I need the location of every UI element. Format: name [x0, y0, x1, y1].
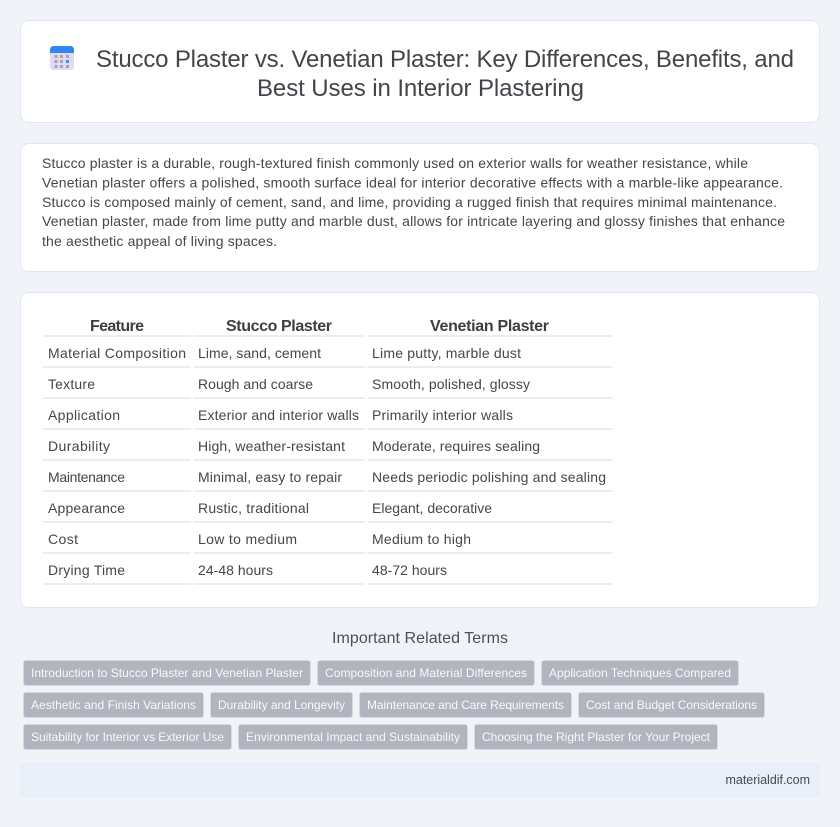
tag: composition: Composition and Material Differences [325, 666, 527, 680]
tag: aesthetic: Aesthetic and Finish Variations [31, 698, 196, 712]
row: application: Exterior and interior walls [198, 407, 359, 423]
tag: application: Application Techniques Compared [549, 666, 731, 680]
table header row [90, 318, 549, 335]
row: maintenance [48, 469, 606, 485]
tag: composition [318, 660, 534, 686]
tag: environmental: Environmental Impact and Sustainability [246, 730, 460, 744]
text block: introduction paragraph: Stucco plaster is a durable, rough-textured finish commonly used on exterior walls for weather resistance, while [42, 155, 748, 171]
tag: choosing: Choosing the Right Plaster for Your Project [482, 730, 711, 744]
row: maintenance: Minimal, easy to repair [198, 469, 342, 485]
icon: calendar [50, 46, 74, 70]
table header row: Feature [90, 318, 144, 335]
row: appearance [48, 500, 492, 516]
row: drying time [48, 562, 447, 578]
related terms tags [24, 660, 764, 750]
row: texture: Texture [48, 376, 95, 392]
tag: suitability: Suitability for Interior vs Exterior Use [31, 730, 224, 744]
row: material composition: Lime putty, marble dust [372, 345, 521, 361]
text block: introduction paragraph: Venetian plaster offers a polished, smooth surface ideal for interior decorative effects with a marble-like appearance. [42, 174, 783, 190]
row: durability: Durability [48, 438, 110, 454]
tag: cost: Cost and Budget Considerations [586, 698, 757, 712]
table header row: Venetian Plaster [430, 318, 549, 335]
tag: choosing [474, 724, 718, 750]
row: cost: Cost [48, 531, 78, 547]
row: drying time: Drying Time [48, 562, 125, 578]
row: durability: High, weather-resistant [198, 438, 345, 454]
tag: introduction: Introduction to Stucco Plaster and Venetian Plaster [31, 666, 303, 680]
table row lines [43, 336, 612, 584]
tag: introduction [24, 660, 310, 686]
row: texture [48, 376, 530, 392]
text block: introduction paragraph: the aesthetic appeal of living spaces. [42, 233, 277, 249]
row: application: Primarily interior walls [372, 407, 513, 423]
row: application: Application [48, 407, 120, 423]
row: material composition [48, 345, 521, 361]
row: texture: Rough and coarse [198, 376, 313, 392]
tag: maintenance [360, 692, 572, 718]
row: drying time: 48-72 hours [372, 562, 447, 578]
tag: environmental [238, 724, 468, 750]
text block: introduction paragraph: Stucco is composed mainly of cement, sand, and lime, providing a rugged finish that requires minimal maintenance. [42, 194, 777, 210]
row: material composition: Material Composition [48, 345, 186, 361]
tag: maintenance: Maintenance and Care Requirements [367, 698, 564, 712]
row: appearance: Rustic, traditional [198, 500, 309, 516]
panel: introduction [20, 144, 820, 272]
row: drying time: 24-48 hours [198, 562, 273, 578]
footer [20, 763, 820, 797]
row: cost: Low to medium [198, 531, 297, 547]
row: material composition: Lime, sand, cement [198, 345, 321, 361]
row: maintenance: Needs periodic polishing and sealing [372, 469, 606, 485]
row: appearance: Appearance [48, 500, 125, 516]
row: application [48, 407, 513, 423]
panel: comparison table [20, 292, 820, 608]
row: texture: Smooth, polished, glossy [372, 376, 530, 392]
tag: durability: Durability and Longevity [218, 698, 345, 712]
title [96, 46, 794, 102]
row: maintenance: Maintenance [48, 469, 125, 485]
title: Best Uses in Interior Plastering [257, 75, 584, 102]
tag: application [542, 660, 738, 686]
text block: introduction paragraph [42, 155, 785, 249]
tag: cost [578, 692, 764, 718]
tag: suitability [24, 724, 232, 750]
row: durability: Moderate, requires sealing [372, 438, 540, 454]
tag: durability [210, 692, 352, 718]
heading: important related terms: Important Related Terms [332, 630, 508, 647]
row: cost: Medium to high [372, 531, 471, 547]
panel: header [20, 20, 820, 122]
tag: aesthetic [24, 692, 204, 718]
row: cost [48, 531, 471, 547]
footer source text: materialdif.com [726, 773, 810, 787]
title: Stucco Plaster vs. Venetian Plaster: Key Differences, Benefits, and [96, 46, 794, 73]
row: appearance: Elegant, decorative [372, 500, 492, 516]
row: durability [48, 438, 540, 454]
table header row: Stucco Plaster [226, 318, 332, 335]
text block: introduction paragraph: Venetian plaster, made from lime putty and marble dust, allows for intricate layering and glossy finishes that enhance [42, 213, 785, 229]
